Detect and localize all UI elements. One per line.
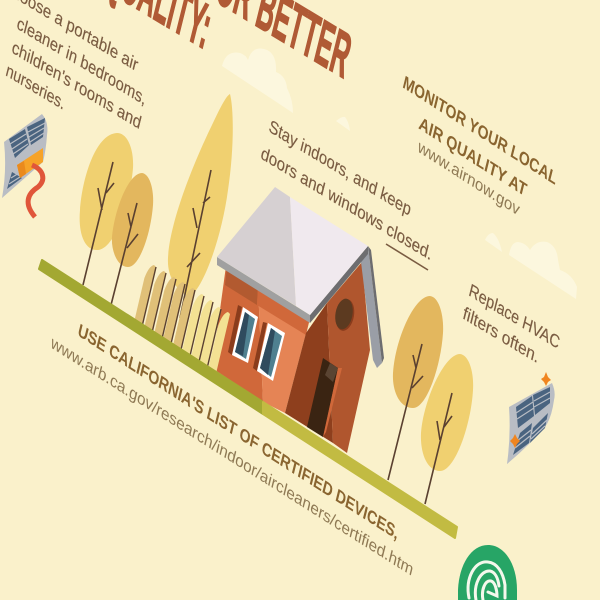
text block: certified devices: www.arb.ca.gov/research/indoor/aircleaners/certified.htm <box>48 333 415 580</box>
text block: certified devices: USE CALIFORNIA'S LIST OF CERTIFIED DEVICES, <box>76 319 401 544</box>
front wall <box>212 266 310 413</box>
tree: right back <box>388 296 443 480</box>
icon: replacement filter <box>507 372 555 464</box>
side wall <box>285 262 370 453</box>
tree: tall <box>168 94 233 318</box>
text block: stay indoors: doors and windows closed. <box>259 142 434 264</box>
text block: portable air cleaner: nurseries. <box>4 59 67 114</box>
window right <box>253 322 285 381</box>
tree: small left <box>111 173 153 305</box>
title <box>56 0 357 91</box>
text block: monitor air quality: MONITOR YOUR LOCAL <box>401 71 559 189</box>
text block: monitor air quality: AIR QUALITY AT <box>417 112 529 200</box>
text block: portable air cleaner <box>0 0 148 133</box>
logo <box>458 545 517 600</box>
text block: monitor air quality: www.airnow.gov <box>415 137 522 220</box>
fence <box>133 265 230 378</box>
icon: portable air cleaner filter <box>2 114 47 217</box>
tree: right front <box>421 354 473 504</box>
ground strip <box>39 260 457 538</box>
text block: replace filters: filters often. <box>461 302 541 367</box>
text block: stay indoors: Stay indoors, and keep <box>267 115 413 220</box>
door <box>307 358 342 437</box>
text block: portable air cleaner: cleaner in bedrooms, <box>15 12 148 109</box>
gable trim <box>361 246 384 368</box>
window left <box>228 305 258 363</box>
text block: portable air cleaner: children's rooms and <box>10 36 143 133</box>
roof <box>217 187 368 323</box>
round attic window <box>333 297 357 332</box>
clouds <box>222 48 577 299</box>
tree: back left <box>80 133 133 285</box>
text block: replace filters: Replace HVAC <box>467 279 562 353</box>
house <box>212 187 384 453</box>
